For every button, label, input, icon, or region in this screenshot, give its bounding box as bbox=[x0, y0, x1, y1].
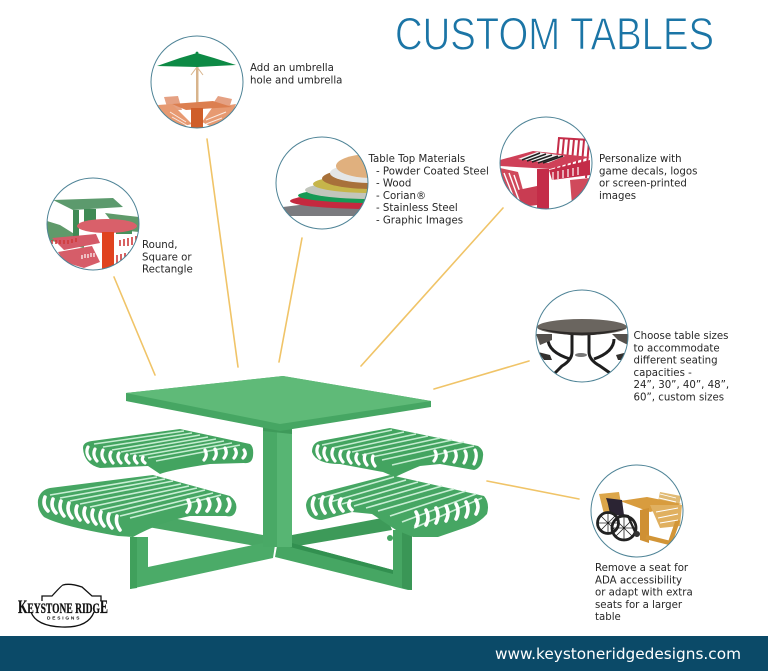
text: game decals: or screen-printed bbox=[599, 178, 687, 190]
footer banner bbox=[0, 636, 768, 671]
text: game decals: images bbox=[599, 191, 636, 202]
title: CUSTOM TABLES bbox=[395, 8, 714, 60]
table pillar bbox=[263, 425, 292, 547]
icon: umbrella table bbox=[151, 36, 243, 130]
seat: back left bbox=[83, 429, 253, 474]
seat: front right bbox=[306, 475, 488, 541]
text: game decals: game decals, logos bbox=[599, 166, 697, 177]
logo: KEYSTONE RIDGE bbox=[18, 597, 108, 618]
text: ADA: or adapt with extra bbox=[595, 588, 693, 598]
icon: table shapes bbox=[47, 178, 139, 270]
icon: ADA wheelchair table bbox=[591, 465, 683, 557]
seat: front left bbox=[38, 475, 236, 537]
text: ADA: ADA accessibility bbox=[595, 575, 682, 586]
table base bbox=[130, 517, 412, 590]
website url: www.keystoneridgedesigns.com bbox=[495, 645, 741, 663]
text: table top materials: - Wood bbox=[376, 178, 411, 190]
seat: back right bbox=[312, 428, 483, 477]
logo: DESIGNS bbox=[47, 616, 81, 622]
logo bbox=[18, 584, 108, 627]
text: shapes: Round, bbox=[142, 240, 177, 251]
icon: round table sizes bbox=[536, 290, 628, 382]
icon: table top materials bbox=[276, 136, 368, 230]
text: table top materials: - Stainless Steel bbox=[376, 203, 458, 214]
text: shapes: Rectangle bbox=[142, 264, 193, 276]
icon: game decal table bbox=[500, 117, 592, 211]
text: table top materials: - Corian® bbox=[376, 191, 426, 202]
text: table top materials: - Powder Coated Steel bbox=[376, 166, 489, 177]
text: table sizes: capacities - bbox=[634, 368, 692, 379]
text: table sizes: to accommodate bbox=[634, 343, 720, 354]
main green table bbox=[38, 376, 488, 590]
text: table sizes: Choose table sizes bbox=[634, 331, 728, 342]
text: table sizes: 60”, custom sizes bbox=[634, 392, 724, 403]
text: ADA: Remove a seat for bbox=[595, 563, 689, 574]
text: table sizes: different seating bbox=[634, 356, 718, 366]
text: table top materials: - Graphic Images bbox=[376, 215, 463, 226]
text: ADA: table bbox=[595, 612, 621, 623]
text: umbrella: Add an umbrella bbox=[250, 63, 334, 74]
text: umbrella: hole and umbrella bbox=[250, 76, 342, 86]
text: table top materials: Table Top Materials bbox=[368, 154, 465, 165]
connector lines bbox=[114, 139, 579, 499]
text: game decals: Personalize with bbox=[599, 154, 682, 165]
text: ADA: seats for a larger bbox=[595, 600, 683, 611]
text: table sizes: 24”, 30”, 40”, 48”, bbox=[634, 380, 729, 391]
table top bbox=[126, 376, 431, 431]
text: shapes: Square or bbox=[142, 252, 192, 263]
